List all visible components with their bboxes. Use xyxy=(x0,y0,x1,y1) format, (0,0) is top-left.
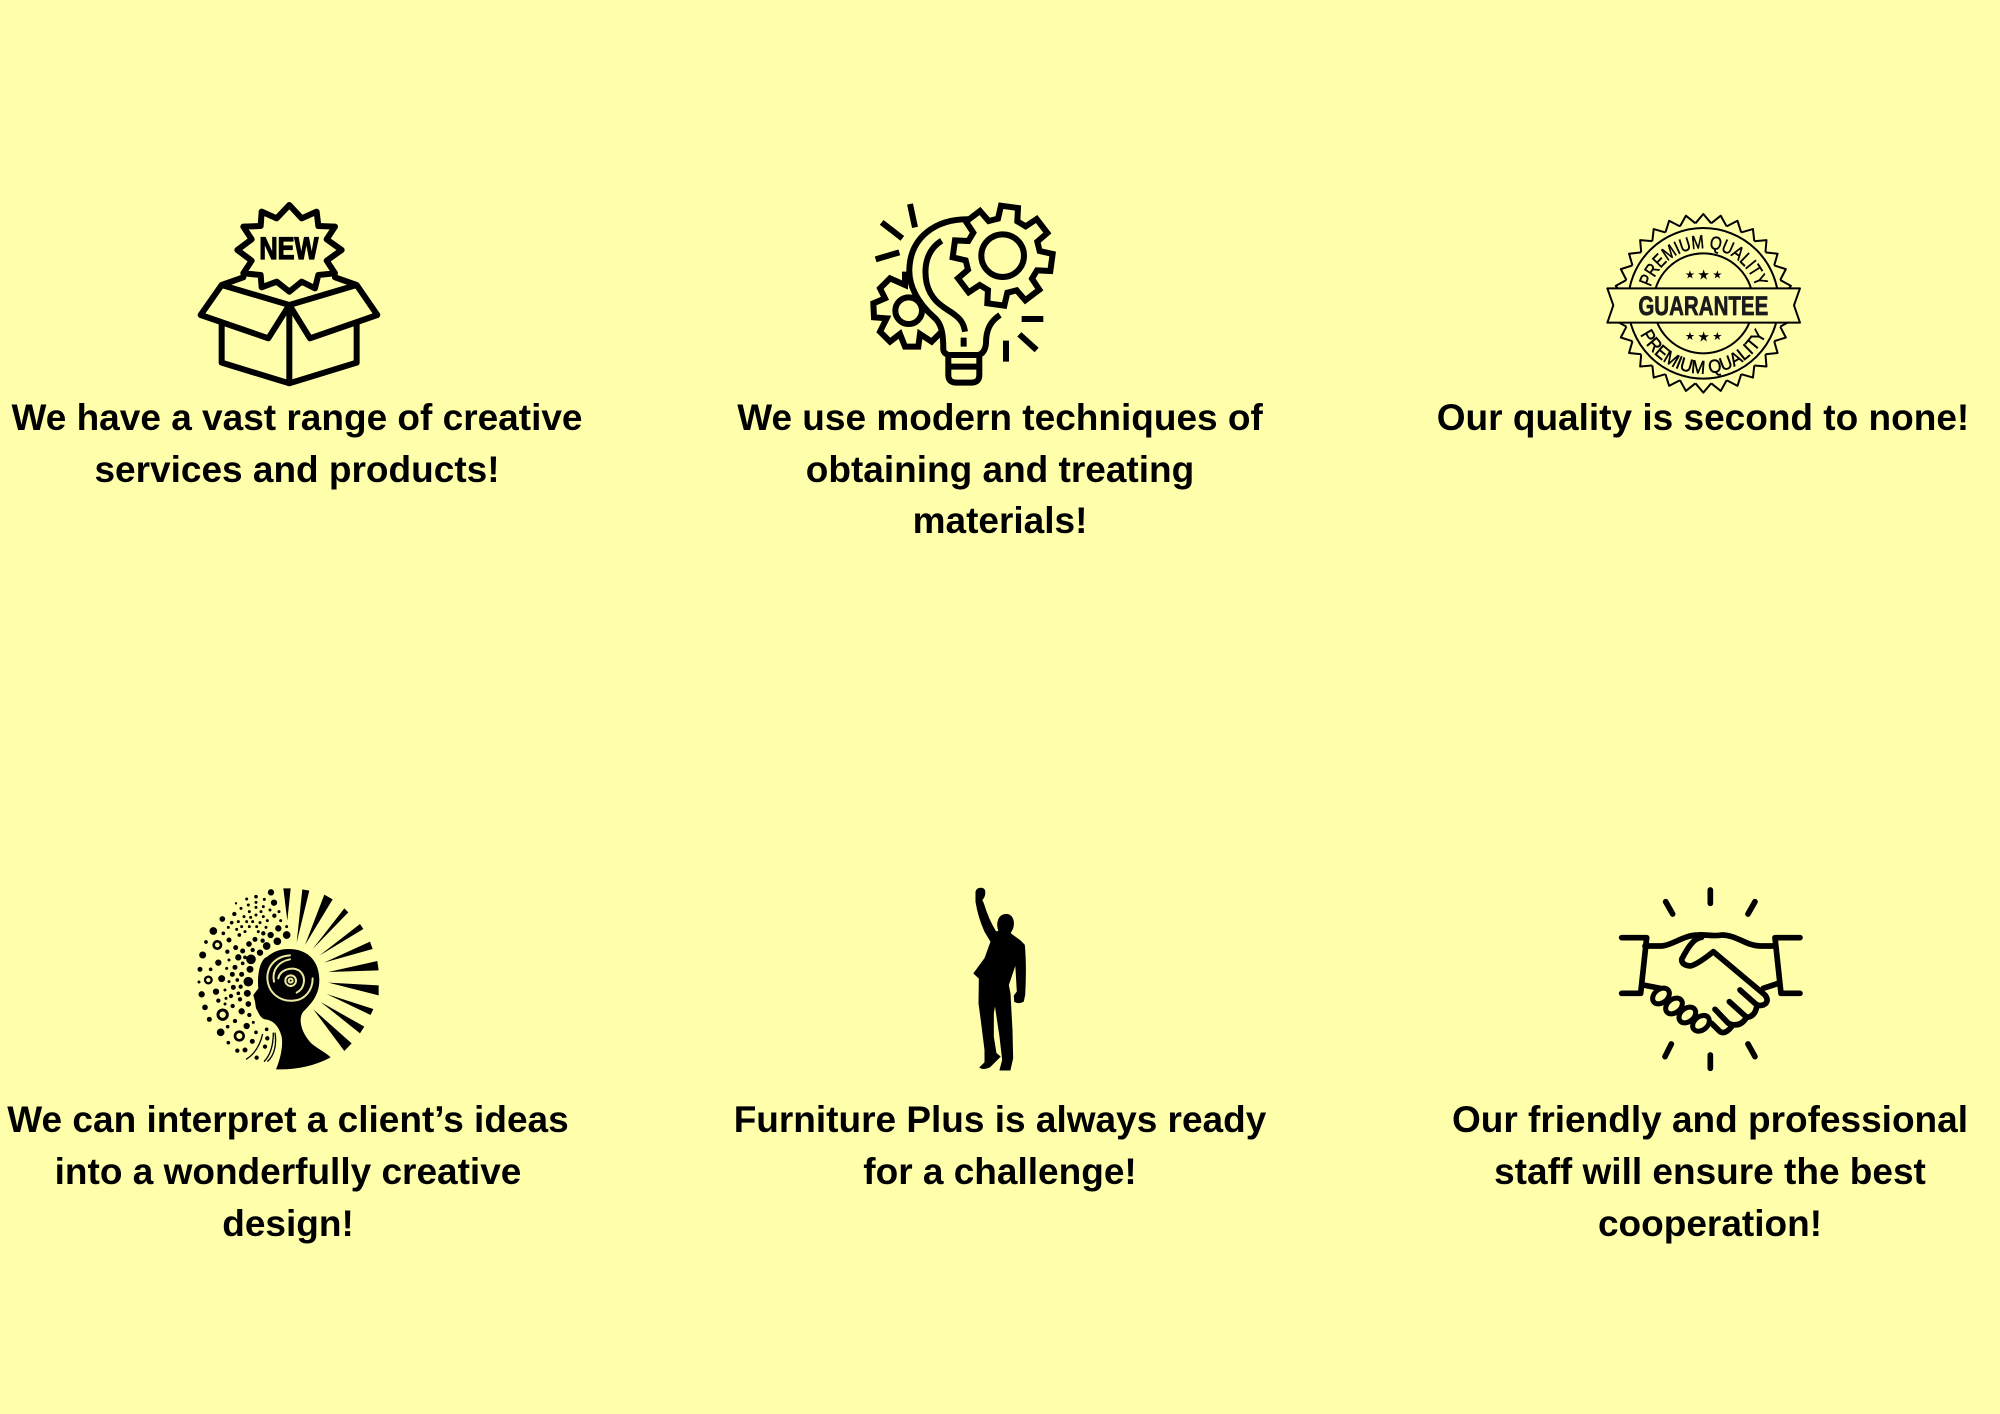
icon: light bulb with gears xyxy=(873,204,1053,383)
text: creative design: into a wonderfully creative xyxy=(55,1151,521,1192)
icon: premium quality guarantee seal: PREMIUM QUALITY xyxy=(1640,328,1764,376)
panel: quality xyxy=(1437,213,1969,438)
text: cooperation: Our friendly and professional xyxy=(1452,1099,1968,1140)
text: vast range: services and products! xyxy=(94,449,500,490)
text: cooperation: staff will ensure the best xyxy=(1494,1151,1926,1192)
text: vast range: We have a vast range of creative xyxy=(11,397,583,438)
icon: premium quality guarantee seal: ★ xyxy=(1712,268,1722,282)
text: cooperation: cooperation! xyxy=(1598,1203,1822,1244)
icon: premium quality guarantee seal xyxy=(1606,213,1801,394)
text: ready for a challenge: for a challenge! xyxy=(863,1151,1137,1192)
icon: open box with new badge xyxy=(201,205,377,383)
panel: ready for a challenge xyxy=(734,888,1267,1192)
icon: premium quality guarantee seal: ★ xyxy=(1685,329,1695,343)
icon: premium quality guarantee seal: ★ xyxy=(1712,329,1722,343)
icon: silhouette of man raising fist xyxy=(974,888,1025,1070)
icon: premium quality guarantee seal: ★ xyxy=(1685,268,1695,282)
panel: cooperation xyxy=(1452,890,1968,1244)
icon: premium quality guarantee seal: PREMIUM QUALITY xyxy=(1638,235,1768,286)
text: modern techniques: obtaining and treating xyxy=(806,449,1194,490)
panel: modern techniques xyxy=(737,204,1263,541)
icon: head with rays and dots xyxy=(198,888,379,1069)
text: creative design: We can interpret a client’s ideas xyxy=(7,1099,569,1140)
text: modern techniques: We use modern techniques of xyxy=(737,397,1263,438)
icon: open box with new badge: NEW xyxy=(259,231,319,266)
icon: premium quality guarantee seal: ★ xyxy=(1697,267,1710,283)
text: creative design: design! xyxy=(222,1203,354,1244)
icon: premium quality guarantee seal: GUARANTEE xyxy=(1638,291,1768,321)
text: ready for a challenge: Furniture Plus is always ready xyxy=(734,1099,1267,1140)
icon: premium quality guarantee seal: ★ xyxy=(1697,329,1710,345)
text: quality: Our quality is second to none! xyxy=(1437,397,1969,438)
panel: vast range xyxy=(11,205,583,490)
panel: creative design xyxy=(7,888,569,1244)
text: modern techniques: materials! xyxy=(913,500,1087,541)
icon: handshake xyxy=(1622,890,1800,1068)
